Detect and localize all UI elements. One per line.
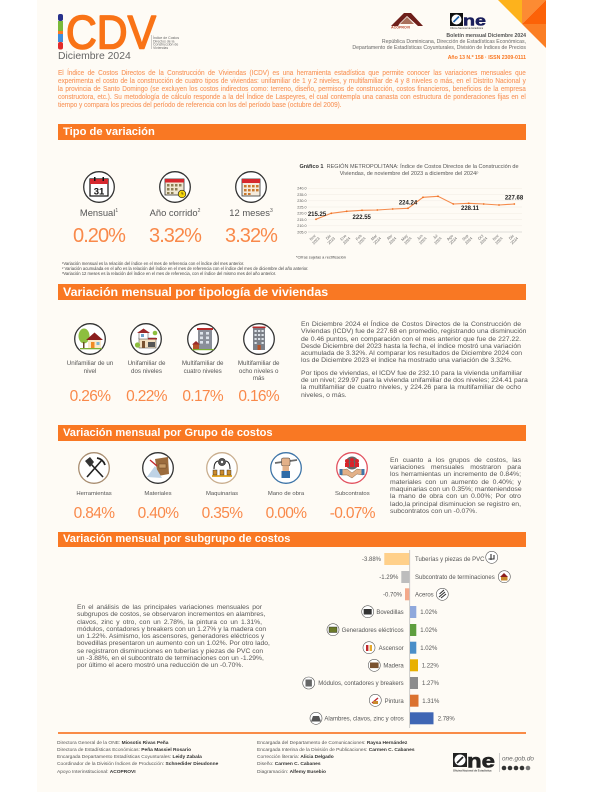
text: bovedillas presentaron un aumento con un 1.02%. Por otro lado, bbox=[77, 640, 270, 647]
label: Unifamiliar de un nivel bbox=[67, 360, 113, 375]
logo: ICDV: Índice de Costos bbox=[153, 36, 179, 40]
publication details: República Dominicana, Dirección de Estadísticas Económicas, bbox=[382, 39, 526, 45]
text: la multifamiliar de cuatro niveles, y 224.26 para la multifamiliar de ocho bbox=[301, 384, 521, 391]
heading: Variación mensual por subgrupo de costos bbox=[58, 532, 526, 547]
line chart: 2024 bbox=[342, 235, 352, 245]
text: variaciones mensuales mostraron para bbox=[390, 464, 521, 471]
bar: Tuberías y piezas de PVC: -3.88% bbox=[362, 557, 382, 563]
text: ICDV analysis by housing type bbox=[301, 320, 528, 399]
icon: two-storey house bbox=[130, 323, 162, 355]
line chart: 2023 bbox=[326, 236, 336, 245]
footnotes bbox=[62, 261, 308, 276]
line chart: Feb bbox=[354, 233, 363, 241]
logo: ICDV: Construcción de bbox=[153, 43, 178, 47]
line chart: 230.0 bbox=[297, 199, 306, 203]
bar: Alambres, clavos, zinc y otros bbox=[310, 712, 455, 724]
bar: Aceros: Aceros bbox=[415, 592, 434, 598]
line chart: Ago bbox=[446, 233, 454, 242]
bar: Ascensor: 1.02% bbox=[420, 646, 438, 652]
label: Multifamiliar de ocho niveles o más bbox=[238, 360, 280, 382]
line chart: 215.0 bbox=[297, 218, 306, 222]
label: Multifamiliar de ocho niveles o más: ocho niveles o bbox=[239, 368, 278, 375]
line chart: 2024 bbox=[372, 235, 383, 245]
footer credits: left column bbox=[57, 740, 218, 775]
footer credits: right column bbox=[257, 740, 415, 775]
footnotes: ³Variación 12 meses es la relación del índice en el mes de referencia, con el índice del mismo mes del año anterior. bbox=[62, 271, 276, 276]
bar: Bovedillas: 1.02% bbox=[420, 610, 438, 616]
label: Multifamiliar de ocho niveles o más: más bbox=[253, 375, 265, 382]
text: Desde Diciembre del 2023 hasta la fecha, el índice mostró una variación bbox=[301, 343, 521, 350]
line chart: 222.55 bbox=[353, 215, 372, 221]
text: Viviendas (ICDV) fue de 227.68 en promedio, registrando una disminución bbox=[301, 328, 526, 335]
bar: Subcontrato de terminaciones: Subcontrato de terminaciones bbox=[415, 575, 495, 581]
bar: Bovedillas: Bovedillas bbox=[376, 610, 404, 616]
text: la mano de obra con un 0.00%; Por otro bbox=[390, 493, 521, 500]
label: Multifamiliar de cuatro niveles: Multifamiliar de bbox=[182, 360, 223, 367]
label: 12 meses: 12 meses3 bbox=[229, 207, 273, 218]
line chart: Jun bbox=[416, 233, 424, 241]
line chart: 2024 bbox=[357, 235, 367, 245]
bar: Pintura: 1.31% bbox=[422, 699, 440, 705]
line chart: Dic bbox=[507, 233, 515, 241]
text: de un nivel; 229.97 para la vivienda unifamiliar de dos niveles; 224.41 para bbox=[301, 377, 528, 384]
text: la provincia de Santo Domingo (se excluyen los costos indirectos como: terreno, diseño, permisos de construcción, costos financieros, beneficios de la empresa bbox=[58, 86, 526, 93]
chart title: Viviendas, de noviembre del 2023 a diciembre del 2024ᵖ bbox=[340, 171, 478, 177]
line chart: 2024 bbox=[418, 235, 428, 245]
text: En el análisis de las principales variaciones mensuales por bbox=[77, 604, 262, 611]
line chart: 2024 bbox=[494, 235, 504, 245]
line chart: Dic bbox=[324, 233, 332, 241]
footer credits: right column: Encargada Interina de la División de Publicaciones: Carmen C. Cabanes bbox=[257, 748, 415, 753]
line chart: Nov bbox=[491, 233, 500, 242]
line chart: Oct bbox=[477, 233, 485, 241]
bar: Madera: 1.22% bbox=[422, 664, 439, 670]
icon: four-storey building bbox=[187, 323, 219, 355]
text: subgroup analysis bbox=[77, 604, 270, 669]
label: Multifamiliar de ocho niveles o más: Multifamiliar de bbox=[238, 360, 279, 367]
icon: tools bbox=[78, 452, 110, 484]
text: clavos, zinc y otro, con un 2.78%, la pintura co un 1.31%, bbox=[77, 619, 262, 626]
text: El Índice de Costos Directos de la Construcción de Viviendas (ICDV) es una herramienta estadística que permite conocer las variaciones mensuales que bbox=[58, 70, 526, 77]
text: experimenta el costo de la construcción de cuatro tipos de viviendas: unifamiliar de 1 y 2 niveles, y multifamiliar de 4 y 8 niveles o más, en el Distrito Nacional y bbox=[58, 78, 526, 85]
bar: Bovedillas bbox=[362, 606, 438, 618]
heading: Tipo de variación bbox=[58, 124, 526, 140]
publication details bbox=[352, 33, 526, 51]
value: 0.40%: 0.40% bbox=[138, 505, 178, 522]
corner decoration: triangles bbox=[498, 0, 546, 48]
icon: calendar 12 months bbox=[235, 171, 267, 203]
bar: Subcontrato de terminaciones: -1.29% bbox=[379, 575, 399, 581]
label: Unifamiliar de dos niveles: dos niveles bbox=[131, 368, 162, 375]
logo: ONE: ne bbox=[463, 12, 486, 30]
bar: Tuberías y piezas de PVC: Tuberías y piezas de PVC bbox=[415, 557, 485, 563]
bar: Alambres, clavos, zinc y otros: Alambres, clavos, zinc y otros bbox=[324, 716, 404, 722]
logo: ICDV: Viviendas bbox=[153, 46, 168, 50]
footer credits: left column: Directora de Estadísticas Económicas: Peña Massiel Rosario bbox=[57, 748, 191, 753]
text: tiempo y compara los precios del período de referencia con los del período base (octubre del 2009). bbox=[58, 102, 342, 109]
label: Unifamiliar de un nivel: nivel bbox=[84, 368, 96, 375]
line chart: 2023 bbox=[311, 236, 321, 245]
value: 3.32% año corrido: 3.32% bbox=[149, 225, 201, 247]
logo: ICDV: CDV bbox=[66, 6, 157, 58]
heading: Variación mensual por Grupo de costos bbox=[58, 425, 526, 441]
logo: ONE footer: one.gob.do bbox=[502, 756, 534, 762]
text: niveles, o más. bbox=[301, 392, 347, 399]
value: -0.07%: -0.07% bbox=[330, 505, 375, 522]
icon: eight-storey building bbox=[243, 323, 275, 355]
line chart: *Cifras sujetas a rectificación bbox=[296, 254, 346, 260]
logo: ONE footer bbox=[453, 752, 534, 772]
bar: Generadores eléctricos: 1.02% bbox=[420, 628, 438, 634]
text: los herramientas un incremento de 0.84%; bbox=[390, 471, 521, 478]
value: 0.84%: 0.84% bbox=[74, 505, 114, 522]
text: por último el acero mostró una reducción de un -0.70%. bbox=[77, 662, 243, 669]
bar: Ascensor bbox=[363, 642, 438, 654]
heading: Tipo de variación: Tipo de variación bbox=[63, 126, 155, 138]
bar: Madera bbox=[368, 659, 439, 671]
line chart: 227.68 bbox=[505, 196, 524, 202]
label: Unifamiliar de un nivel: Unifamiliar de un bbox=[67, 360, 113, 367]
logo: ONE footer: ne bbox=[467, 752, 495, 772]
icon: calendar 31: 31 bbox=[94, 186, 105, 197]
text: En cuanto a los grupos de costos, las bbox=[390, 457, 521, 464]
logo: ICDV: Directos de la bbox=[153, 39, 174, 43]
label: Unifamiliar de dos niveles bbox=[128, 360, 166, 375]
line chart: 205.0 bbox=[297, 230, 306, 234]
heading: Variación mensual por Grupo de costos: Variación mensual por Grupo de costos bbox=[63, 427, 273, 439]
text: Por tipos de viviendas, el ICDV fue de 232.10 para la vivienda unifamiliar bbox=[301, 370, 522, 377]
line chart: 2024 bbox=[433, 235, 443, 245]
label: Mano de obra: Mano de obra bbox=[268, 491, 304, 497]
line chart: 228.11 bbox=[461, 206, 480, 212]
text: materiales con un aumento de 0.40%; y bbox=[390, 479, 521, 486]
label: Materiales: Materiales bbox=[144, 491, 172, 497]
bar: Módulos, contadores y breakers bbox=[303, 677, 440, 689]
logo: ACOPROVI: ACOPROVI bbox=[391, 26, 410, 30]
bar: Pintura bbox=[369, 694, 440, 707]
line chart: Ene bbox=[339, 233, 347, 242]
value: 0.20%: 0.20% bbox=[73, 225, 125, 247]
label: Mensual: Mensual1 bbox=[80, 207, 118, 218]
footer credits: right column: Diseño: Carmen C. Cabanes bbox=[257, 762, 321, 767]
value: 0.22%: 0.22% bbox=[126, 388, 167, 405]
line chart: 2024 bbox=[509, 235, 520, 245]
footer credits: left column: Coordinador de la División Índices de Producción: Schnedider Dieudonne bbox=[57, 762, 218, 767]
issue number: Año 13 N.º 158 · ISSN 2309-0111 bbox=[448, 55, 526, 61]
line chart: 2024 bbox=[403, 235, 413, 245]
line chart: 224.24 bbox=[399, 200, 418, 206]
line chart: 2024 bbox=[388, 235, 398, 245]
footnotes: ² Variación acumulada en el año es la relación del índice en el mes de referencia con el índice del mes de diciembre del año anterior. bbox=[62, 266, 308, 271]
bar: Módulos, contadores y breakers: Módulos, contadores y breakers bbox=[318, 681, 404, 687]
line chart: 210.0 bbox=[297, 224, 306, 228]
chart title: Gráfico 1 REGIÓN METROPOLITANA: Índice de Costos Directos de la Construcción de bbox=[299, 164, 519, 170]
line chart: 240.0 bbox=[297, 187, 306, 191]
publication details: Boletín mensual Diciembre 2024 bbox=[446, 33, 526, 39]
logo: ONE footer: Oficina Nacional de Estadística bbox=[453, 768, 492, 772]
icon: labour bbox=[270, 452, 302, 484]
heading: Variación mensual por subgrupo de costos: Variación mensual por subgrupo de costos bbox=[63, 533, 290, 545]
bar: Pintura: Pintura bbox=[385, 699, 404, 705]
heading: Variación mensual por tipología de viviendas bbox=[58, 284, 526, 300]
logo: ONE: Oficina Nacional de Estadística bbox=[450, 27, 484, 30]
text: de 0.46 puntos, en comparación con el mes anterior que fue de 227.22. bbox=[301, 336, 521, 343]
value: 0.17%: 0.17% bbox=[182, 388, 223, 405]
value: 3.32% 12 meses: 3.32% bbox=[225, 225, 277, 247]
label: Herramientas: Herramientas bbox=[76, 491, 112, 497]
line chart: May bbox=[400, 233, 409, 242]
text: lado,la principal disminucion se registro en, bbox=[390, 501, 521, 508]
bar: Módulos, contadores y breakers: 1.27% bbox=[422, 681, 440, 687]
intro text bbox=[58, 68, 526, 109]
footer credits: left column: Encargada Departamento Estadísticas Coyunturales: Leidy Zabala bbox=[57, 755, 202, 760]
line chart: Jul bbox=[432, 233, 439, 240]
value: 0.00%: 0.00% bbox=[266, 505, 306, 522]
line chart: 215.25 bbox=[308, 212, 327, 218]
text: subgrupos de costos, se observaron incrementos en alambres, bbox=[77, 611, 265, 618]
line chart: Mar bbox=[370, 233, 379, 241]
footer credits: right column: Encargada del Departamento de Comunicaciones: Raysa Hernández bbox=[257, 740, 407, 746]
text: maquinarias con un 0.35%; manteniendose bbox=[390, 486, 522, 493]
bar: Generadores eléctricos: Generadores eléctricos bbox=[342, 628, 404, 634]
line chart: Nov bbox=[308, 233, 317, 242]
icon: subcontractors bbox=[336, 452, 368, 484]
icon: calendar with clock bbox=[159, 171, 191, 203]
label: Maquinarias: Maquinarias bbox=[206, 491, 238, 497]
line chart: 2024 bbox=[448, 235, 459, 245]
bar: Ascensor: Ascensor bbox=[379, 646, 404, 652]
icon: machinery bbox=[206, 452, 238, 484]
line chart: 220.0 bbox=[297, 212, 306, 216]
label: Año corrido: Año corrido2 bbox=[150, 207, 200, 218]
label: Subcontratos: Subcontratos bbox=[335, 491, 370, 497]
footer credits: left column: Directora General de la ONE: Miosotis Rivas Peña bbox=[57, 740, 168, 746]
bar: Tuberías y piezas de PVC bbox=[362, 551, 498, 565]
text: En Diciembre 2024 el Índice de Costos Directos de la Construcción de bbox=[301, 321, 521, 328]
label: Multifamiliar de cuatro niveles bbox=[182, 360, 224, 375]
footer divider bbox=[58, 732, 526, 734]
text: acumulada de 3.32%. Al comparar los resultados de Diciembre 2024 con bbox=[301, 350, 522, 357]
publication details: Departamento de Estadísticas Coyunturales, División de Índices de Precios bbox=[352, 45, 526, 51]
label: Multifamiliar de cuatro niveles: cuatro niveles bbox=[184, 368, 222, 375]
text: los de Diciembre 2023 el índice ha mostrado una variación de 3.32%. bbox=[301, 357, 512, 364]
icon: calendar 31 bbox=[83, 171, 115, 203]
icon: materials bbox=[142, 452, 174, 484]
bar: Generadores eléctricos bbox=[327, 624, 438, 636]
chart title bbox=[299, 163, 519, 177]
heading: Variación mensual por tipología de viviendas: Variación mensual por tipología de viviendas bbox=[63, 285, 328, 299]
bar: Aceros bbox=[383, 588, 448, 600]
date: Diciembre 2024: Diciembre 2024 bbox=[58, 51, 131, 62]
logo: ACOPROVI bbox=[391, 13, 423, 30]
text: cost groups analysis bbox=[390, 457, 522, 515]
footer credits: right column: Diagramación: Alfemy Eusebio bbox=[257, 770, 326, 775]
text: un -3.88%, en el subcontrato de terminaciones con un -1.29%, bbox=[77, 655, 264, 662]
icon: one-storey house bbox=[74, 323, 106, 355]
bar: Subcontrato de terminaciones bbox=[379, 571, 510, 583]
line chart: 2024 bbox=[464, 235, 474, 245]
text: constructora, etc.). Su metodología de cálculo responde a la del Índice de Laspeyres, el cual contempla una canasta con estructura de ponderaciones fijas en el bbox=[58, 94, 526, 101]
bar: Madera: Madera bbox=[383, 664, 404, 670]
line chart: 2024 bbox=[479, 235, 489, 245]
line chart: Sep bbox=[461, 233, 469, 242]
text: subcontratos con un -0.07%. bbox=[390, 508, 477, 515]
text: módulos, contadores y breakers con un 1.27% y la madera con bbox=[77, 626, 266, 633]
text: se registraron disminuciones en tuberías y piezas de PVC con bbox=[77, 648, 263, 655]
logo: ONE bbox=[450, 12, 486, 30]
text: un 1.22%. Asimismo, los ascensores, generadores eléctricos y bbox=[77, 633, 264, 640]
footer credits: left column: Apoyo Interinstitucional: ACOPROVI bbox=[57, 770, 136, 775]
footnotes: ¹Variación mensual es la relación del índice en el mes de referencia con el índice del mes anterior. bbox=[62, 261, 244, 266]
bar: Alambres, clavos, zinc y otros: 2.78% bbox=[438, 716, 455, 722]
line chart: Abr bbox=[386, 233, 394, 241]
bar: Aceros: -0.70% bbox=[383, 592, 403, 598]
line chart: 235.0 bbox=[297, 193, 306, 197]
value: 0.16%: 0.16% bbox=[238, 388, 279, 405]
value: 0.26%: 0.26% bbox=[70, 388, 110, 405]
line chart: 225.0 bbox=[297, 205, 306, 209]
label: Unifamiliar de dos niveles: Unifamiliar de bbox=[128, 360, 165, 367]
footer credits: right column: Corrección literaria: Alicia Delgado bbox=[257, 755, 334, 760]
value: 0.35%: 0.35% bbox=[202, 505, 242, 522]
